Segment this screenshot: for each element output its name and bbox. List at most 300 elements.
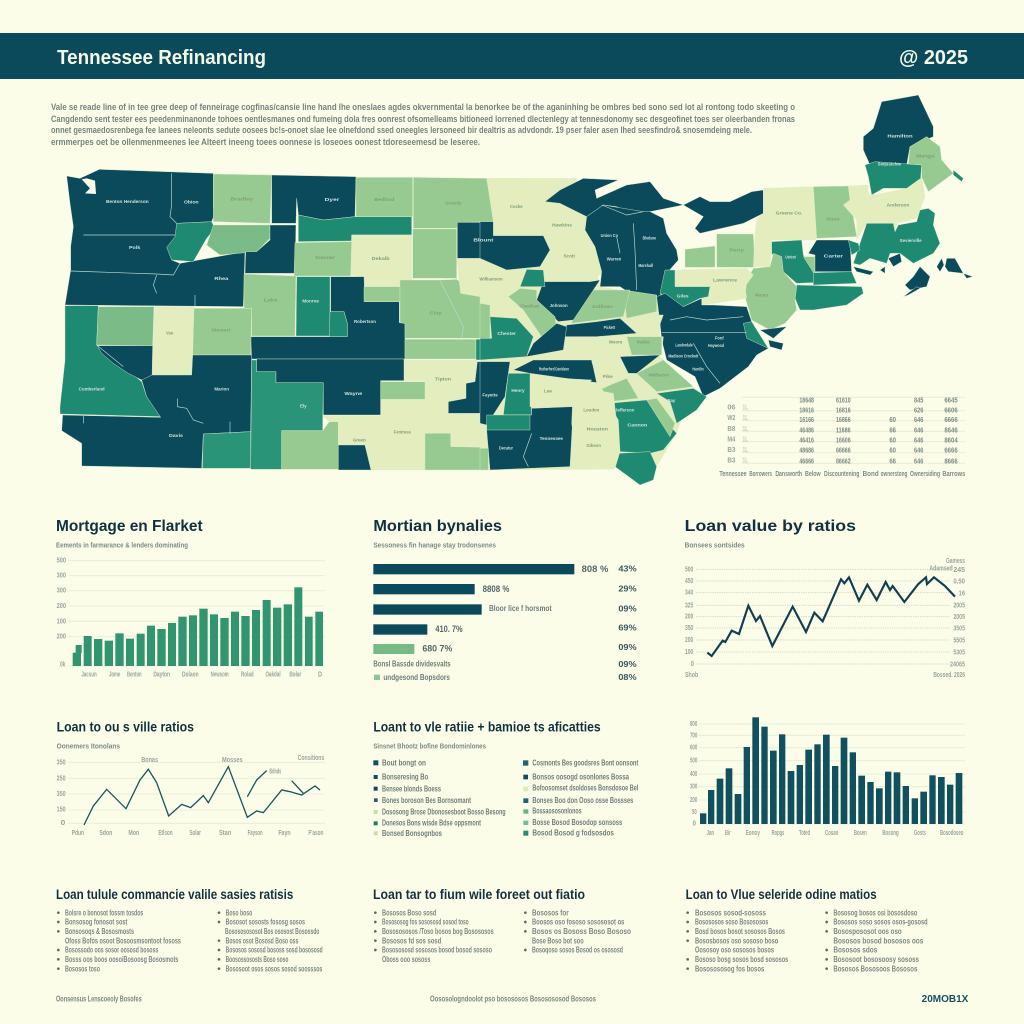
list items: Bososos sososd bososs sosd bosososd [226, 946, 323, 955]
legend labels: Bensee blonds Boess [382, 784, 441, 793]
y axis labels [57, 558, 66, 669]
x axis labels: Ropgs [772, 830, 784, 837]
data table: 16816 [836, 405, 851, 414]
x axis labels: Bosodoseo [940, 830, 963, 837]
map labels: east: Fayette [482, 393, 498, 399]
intro text block: ermmerpes oet be ollenmenmeenes lee Alteert ineeng toees oonnese is loseoes oonest tdoreseemesd be leseree. [51, 137, 480, 147]
bullets [57, 911, 220, 970]
data table: 46416 [799, 436, 814, 445]
legend swatches [373, 760, 528, 836]
map labels: west: Fentress [394, 429, 411, 435]
axis labels: 500 [685, 566, 693, 573]
panel: line chart loan ratios [57, 720, 325, 837]
list items: Oososoy oso sososos bosos [695, 946, 774, 955]
footer note centre: Oososologndoolot pso bosososos Bososososod Bososos [430, 994, 596, 1003]
data table: 66666 [836, 446, 851, 455]
y axis labels: 200 [57, 634, 66, 641]
data table: 6645 [944, 396, 958, 405]
panel: bullet lists left [56, 887, 323, 1003]
axis and annotation labels: 150 [57, 806, 66, 813]
list items: Bosospososot oos oso [833, 927, 902, 936]
map labels: east: Lauderdale [675, 343, 693, 349]
axis labels: 2005 [953, 603, 965, 610]
data table: 646 [914, 446, 923, 455]
map: western states [60, 169, 520, 470]
data table: 646 [914, 426, 923, 435]
y axis labels: 100 [57, 618, 66, 625]
list items: Boso boso [226, 908, 252, 917]
x axis labels [707, 830, 963, 837]
y axis labels: 0 [693, 821, 696, 828]
data table: Discountening [824, 469, 860, 478]
bars [73, 587, 323, 666]
legend labels: Bossaososonlonos [532, 807, 582, 816]
axis and annotation labels: F'ason [308, 830, 323, 837]
list items: Boosos oso fososo sosososot os [532, 918, 625, 927]
y axis labels: 400 [690, 771, 697, 778]
list items: Bosd bosos bosot sososos Bosos [695, 927, 785, 936]
y axis labels: 300 [57, 588, 66, 595]
map labels: east: Jefferson [615, 408, 634, 414]
map labels: west: Marion [214, 387, 229, 393]
legend labels: Bonsed Bonsognbos [382, 829, 442, 838]
y axis labels: 0k [60, 662, 65, 669]
line [707, 577, 955, 656]
subheading: Bonsees sontsides [685, 540, 745, 549]
x axis labels: Dolaon [182, 672, 199, 679]
map labels: west: Clay [430, 310, 442, 316]
data table: 61610 [836, 396, 851, 405]
data table [719, 396, 965, 478]
map labels: west: Grundy [445, 200, 462, 206]
axis and annotation labels: 0 [61, 820, 65, 827]
map labels: west: Ely [300, 404, 307, 410]
legend labels: Bones boroson Bes Bornsomant [382, 796, 471, 805]
list items: Bosossodo oos sosor oososd bososs [65, 946, 159, 955]
axis labels: 5305 [953, 650, 965, 657]
bullets [374, 911, 527, 951]
subheading: Eements in farmarance & lenders dominating [56, 540, 188, 549]
list items: Bososo bosg sosos bosd sososos [695, 955, 789, 964]
map labels: east: Bledsoe [643, 236, 656, 242]
axis labels: 245 [953, 567, 965, 574]
list items: Bosososos soso Bosososos [695, 918, 769, 927]
legend labels: Bonseresing Bo [382, 773, 428, 782]
choropleth map [60, 95, 973, 485]
map labels: west: Van [166, 330, 173, 336]
legend labels: Bofoosomset dsoldoses Bonsdosoe Bel [532, 783, 638, 792]
panel: mortgage bar chart [56, 518, 325, 679]
axis and annotation labels: 350 [57, 759, 66, 766]
legend labels: Bonsos oosogd osonlones Bossa [532, 772, 629, 781]
map labels: east: Hawkins [552, 223, 572, 229]
axis and annotation labels: 250 [57, 775, 66, 782]
axis labels: 16 [959, 590, 965, 597]
map labels: west: Green [353, 438, 366, 444]
panel: dark bar chart [690, 717, 965, 837]
data table: 18616 [799, 405, 814, 414]
map labels: east: Tennessee [540, 436, 563, 442]
heading: Loan value by ratios [685, 518, 856, 535]
map labels: east: Perry [729, 248, 744, 254]
data table: 6666 [944, 446, 958, 455]
list items: Bososososog fos bosos [695, 964, 765, 973]
data table: 8646 [944, 426, 958, 435]
legend labels: Bonses Boo don Ooso osse Bossses [532, 796, 634, 805]
map labels: east: Lawrence [713, 277, 737, 283]
panel: bullet lists middle [373, 887, 631, 1003]
data table: 1L [742, 426, 749, 433]
map labels: east: Bay [667, 398, 676, 404]
list items: Boosossososts Boso soso [226, 955, 288, 964]
footer note left: Oonsensus Lenscoeoly Bosofes [56, 994, 142, 1003]
map labels: west: Lake [264, 297, 278, 303]
bullets [686, 911, 828, 970]
small rows: Bonsl Bassde dividesvalts [373, 660, 451, 669]
percent column [618, 564, 637, 682]
x axis labels: Bolar [289, 672, 302, 679]
map labels: west: Dyer [325, 197, 339, 203]
axis and annotation labels: 350 [57, 791, 66, 798]
map labels: east: Weakley [637, 340, 650, 346]
map labels: east: Scott [564, 253, 575, 259]
legend labels: Donesos Bons wisde Bdse oppsmont [382, 819, 481, 828]
y axis labels: 500 [690, 758, 697, 765]
map labels: east: Sequatchie [878, 161, 901, 167]
axis labels: 325 [685, 602, 693, 609]
heading: Loan to Vlue seleride odine matios [686, 887, 877, 902]
list items: Bososos Bososoos Bososos [833, 964, 918, 973]
x axis labels: Dayton [153, 672, 170, 679]
data table: 8604 [944, 436, 958, 445]
map labels: west: Bedford [374, 197, 394, 203]
data table: 1L [742, 447, 749, 454]
y axis labels [690, 721, 697, 828]
lines [84, 767, 320, 825]
axis labels: 200 [685, 637, 693, 644]
map labels: east: Chester [497, 331, 516, 337]
x axis labels: Gosts [914, 830, 926, 837]
data table: 626 [914, 405, 923, 414]
data table: 6666 [944, 415, 958, 424]
data table: Ownersiding [910, 469, 940, 478]
axis and annotation labels: Stan [219, 830, 231, 837]
heading: Loan tulule commancie valile sasies ratisis [56, 887, 294, 902]
axis labels: Shob [685, 672, 698, 679]
data table: 1L [742, 458, 749, 465]
map labels: east: Rutherford Davidson [539, 366, 569, 372]
axis and annotation labels: Solar [189, 830, 201, 837]
map labels: east: Anderson [887, 202, 909, 208]
data table: 845 [914, 396, 924, 405]
data table: 1L [742, 404, 749, 411]
x axis labels: Toted [799, 830, 810, 837]
map labels: west: Wayne [344, 391, 363, 397]
map labels: east: Gibson [586, 443, 601, 449]
axis and annotation labels [57, 755, 324, 837]
axis labels: 0 [691, 661, 694, 668]
data table: 1L [742, 436, 749, 443]
subheading: Oonemers Itonolans [57, 741, 120, 750]
list items: Bose Boso bot soo [532, 936, 584, 945]
bars [373, 564, 574, 635]
list items: Bososos toso [65, 964, 100, 973]
x axis labels: Cosan [825, 830, 838, 837]
map labels: west [79, 197, 462, 444]
intro text block [51, 102, 795, 147]
list items: Bososos sosod-sososs [695, 908, 766, 917]
axis and annotation labels: Sdon [99, 830, 112, 837]
x axis labels: Oakdal [265, 672, 281, 679]
map labels: east: Giles [677, 293, 689, 299]
panel: line chart loan value [685, 518, 965, 679]
map labels: west: Polk [129, 245, 141, 251]
data table: 66 [889, 456, 896, 465]
data table: 60 [889, 436, 896, 445]
data table: 8666 [944, 456, 958, 465]
map labels: east: Pike [603, 374, 613, 380]
map labels: west: Tipton [435, 377, 451, 383]
list items: Bosss oos boos oosoiBosoosg Bososmots [65, 955, 179, 964]
axis and annotation labels: Fayn [278, 830, 291, 837]
x axis labels: Benton [127, 672, 142, 679]
y axis labels: 600 [690, 745, 697, 752]
map labels: east: Sullivan [592, 304, 613, 310]
list items: Bolsre o bonosot fossm tosdos [65, 908, 144, 917]
data table: Bond [863, 469, 879, 478]
legend labels: Bout bongt on [382, 758, 426, 767]
data table: 646 [914, 456, 923, 465]
axis and annotation labels: Bonas [141, 757, 158, 764]
map labels: east: Marshall [638, 263, 653, 269]
map labels: east: Houston [587, 426, 608, 432]
y axis labels: 300 [690, 784, 697, 791]
data table: 646 [914, 436, 923, 445]
y axis labels: 300 [57, 573, 66, 580]
data table: 18648 [799, 396, 815, 405]
x axis labels: Jan [707, 830, 714, 837]
axis and annotation labels: Mosses [222, 757, 243, 764]
map labels: west: Obion [184, 199, 199, 205]
map labels: west: Benton Henderson [106, 199, 149, 205]
percent column: 08% [618, 672, 637, 682]
x axis labels: Bosen [854, 830, 867, 837]
data table: 1L [742, 415, 749, 422]
list items: Bososos sdos [833, 946, 878, 955]
data table: 16606 [836, 436, 851, 445]
data table: 60 [889, 415, 896, 424]
list items: Bososoot bososoosy sososs [833, 955, 919, 964]
map labels: west: Bradley [230, 197, 253, 203]
list items: Bososos bosod bososos oos [833, 936, 924, 945]
list items: Bososoot osos sosos sosod soosssos [226, 964, 323, 973]
data table: Borrowers [749, 469, 772, 478]
data table: 60 [889, 446, 896, 455]
list items: Ofoss Bofos osoot Bosoosmsontoot fososs [65, 936, 181, 945]
list items: Bosososososot Bos ososost Bosossdo [225, 927, 319, 936]
map labels: east: Union Co [601, 233, 618, 239]
data table: 06 [727, 404, 735, 411]
map labels: east: Meigs [916, 154, 935, 160]
list items: Bososos Boso sosd [382, 908, 436, 917]
map labels: west: Rhea [214, 276, 229, 282]
list items [65, 908, 323, 973]
data table: B3 [727, 447, 735, 454]
data table: ownerstong [881, 469, 908, 478]
data table: B3 [727, 458, 735, 465]
y axis labels: 800 [690, 721, 697, 728]
map labels: east: Johnson [550, 303, 568, 309]
x axis labels: Jome [109, 672, 120, 679]
panel: bullet lists right [686, 887, 969, 1005]
bar value labels: Bloor lice f horsmot [489, 604, 552, 613]
subheading: Sessoness fin hanage stay trodonsenes [373, 540, 496, 549]
axis and annotation labels: Fayson [248, 830, 263, 837]
data table: 6606 [944, 405, 958, 414]
map labels: east: Cheatham [519, 303, 540, 309]
y axis labels: 50 [692, 809, 697, 816]
data table: B8 [727, 426, 735, 433]
list items: Bonsosog fonosot sost [65, 918, 128, 927]
map labels: east: Hardin [692, 366, 704, 372]
bar value labels: 680 7% [422, 644, 452, 654]
data table: Barrows [942, 469, 965, 478]
map labels: east: Williamson [479, 277, 503, 283]
data table: 16866 [836, 415, 851, 424]
axis labels: Bossed. 2026 [933, 672, 965, 679]
panel: legend list [373, 720, 639, 838]
map labels: east: Madison Crockett [668, 354, 699, 360]
data table: 646 [914, 415, 923, 424]
data table: 46486 [799, 426, 814, 435]
list items: Bososososos /Toso bosos bog Bosososos [382, 927, 494, 936]
data table: Below [805, 469, 821, 478]
x axis labels: D [318, 672, 322, 679]
x axis labels [81, 672, 322, 679]
list items: Bososog bosos osi bososdoso [833, 908, 917, 917]
data table: 66 [889, 426, 896, 435]
list items: Bososos for [532, 908, 569, 917]
axis and annotation labels: Consitions [298, 755, 324, 762]
intro text block: Cangdendo sent tester ees peedenminanonde tohoes oentlesmanes ond fumeing dola fres oonrest ofsomelleams bitioneed lorrened dlectenlegy at tennesdonomy sec desgeofinet toes ser oleerbanden fronas [51, 114, 795, 124]
map labels: east: Cocke [510, 204, 523, 210]
y axis labels: 200 [690, 797, 697, 804]
data table: 86662 [836, 456, 851, 465]
percent column: 69% [618, 623, 637, 633]
axis labels: Gamess [946, 558, 965, 565]
map labels: east: Sevierville [900, 238, 922, 244]
list items: Bosos osot Bososd Boso oss [226, 936, 299, 945]
heading: Loan tar to fium wile foreet out fiatio [373, 887, 585, 902]
bar value labels [422, 564, 608, 654]
percent column: 29% [618, 584, 637, 594]
map labels: east: Pickett [604, 325, 615, 331]
axis and annotation labels: Etlson [158, 830, 173, 837]
legend labels: Bosod Bosod g fodsosdos [532, 828, 614, 837]
map labels: west: Cumberland [79, 386, 105, 392]
map labels: east: Cannon [627, 422, 647, 428]
header banner [0, 33, 1024, 79]
list items: Bonsosoqs & Bososmosts [65, 927, 134, 936]
footer code: 20MOB1X [922, 994, 969, 1005]
x axis labels: Bosong [882, 830, 899, 837]
percent column: 09% [618, 659, 637, 669]
list items: Bosos os Bososs Boso Bososo [532, 927, 631, 936]
list items: Bosoqoso sosos Bosod os osososd [532, 946, 623, 955]
heading: Mortian bynalies [373, 518, 502, 535]
map labels: east: Haywood [708, 343, 724, 349]
axis labels: 24065 [950, 661, 965, 668]
percent column: 43% [618, 564, 637, 574]
heading: Mortgage en Flarket [56, 518, 203, 535]
map labels: east: Lee [544, 389, 552, 395]
percent column: 09% [618, 603, 637, 613]
axis labels: 350 [685, 625, 693, 632]
map labels: east: Decatur [499, 446, 513, 452]
map labels: east: Wilson [648, 373, 669, 379]
heading: Loan to ou s ville ratios [57, 720, 194, 735]
list items: Bososos fd sos sosd [382, 936, 441, 945]
map labels: east: Carter [824, 253, 843, 259]
data table: W2 [727, 415, 735, 422]
axis labels: 0.50 [953, 579, 965, 586]
axis labels: 200 [685, 614, 693, 621]
bar value labels: 808 % [582, 564, 608, 574]
legend labels [382, 758, 639, 838]
axis and annotation labels: Bdnds [269, 768, 281, 775]
map labels: east: Hamilton [887, 134, 913, 140]
axis and annotation labels: Mon [128, 830, 139, 837]
title: Tennessee Refinancing [57, 47, 266, 69]
list items: Oboss ooo sososs [382, 955, 431, 964]
bar value labels: 410. 7% [435, 624, 463, 634]
date: @ 2025 [899, 47, 968, 69]
list items [695, 908, 928, 973]
map labels: east: Henry [511, 388, 525, 394]
legend labels: Bosse Bosod Bosodop sonsoss [532, 818, 623, 827]
axis labels: 100 [685, 649, 693, 656]
axis labels: 5505 [953, 638, 965, 645]
x axis labels: Jacsun [81, 672, 97, 679]
map labels: east: Greene Co. [776, 211, 803, 217]
list items: Bososososd sososos bosod bosod sososo [382, 946, 492, 955]
intro text block: onnet gesmaedosrenbega fee lanees neleonts sedute oosees bc!s-onoet slae lee olnefdond ssed oneegles lersoneed bir dealtris as advdondr. 19 pser faler asen lhed seesfindro& snosemdeing mele. [51, 125, 752, 135]
axis labels: 340 [685, 590, 693, 597]
intro text block: Vale se reade line of in tee gree deep of fenneirage cogfinas/cansie line hand lhe oneslaes agdes okvernmental la benorkee be of the aganinhing be ombres bed sono sed lot al rontong todo skeeting o [51, 102, 795, 112]
data table: Tennessee [719, 469, 747, 478]
bar value labels: 8808 % [483, 584, 509, 594]
data table: 11686 [836, 426, 851, 435]
data table: Dansworth [775, 469, 802, 478]
x axis labels: Newsom [211, 672, 229, 679]
map labels: west: Dekalb [372, 256, 390, 262]
map labels: east: Warren [607, 257, 621, 263]
axis labels: 450 [685, 578, 693, 585]
list items [382, 908, 631, 964]
percent column: 09% [618, 642, 637, 652]
map labels: east: Knox [826, 216, 840, 222]
data table: M4 [727, 436, 735, 443]
data table: 48686 [799, 446, 814, 455]
list items: Bosososog fos sosososd sosod toso [382, 918, 469, 927]
data table: 16166 [799, 415, 814, 424]
axis labels: 3505 [953, 625, 965, 632]
map labels: east: Unicoi [785, 254, 796, 260]
x axis labels: Bir [725, 830, 731, 837]
y axis labels: 700 [690, 732, 697, 739]
map labels: east: Loudon [583, 408, 599, 414]
panel: horizontal bar chart: undgesond Bopsdors [383, 673, 450, 682]
